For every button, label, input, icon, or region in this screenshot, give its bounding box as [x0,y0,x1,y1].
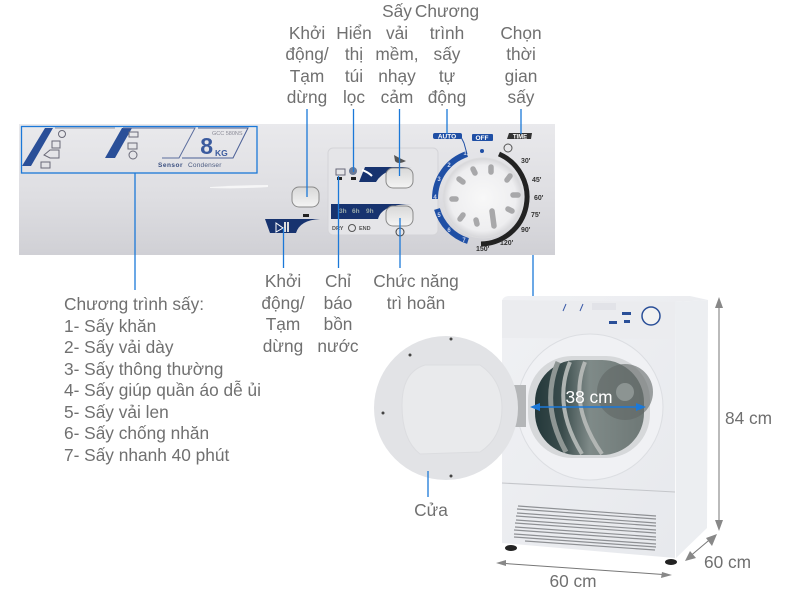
bottom callout labels: Chỉ [325,271,351,291]
top callout labels: gian [505,66,537,86]
top callout labels: động/ [285,44,329,64]
drying program list: 3- Sấy thông thường [64,359,223,379]
top callout labels: Sấy [382,1,412,21]
program dial: 75' [531,212,541,219]
program dial: 150' [476,246,490,253]
program dial: 30' [521,158,531,165]
program labels: KG [215,148,228,158]
start pause button [265,187,320,233]
top callout labels: động [428,87,466,107]
depth dimension: 60 cm [704,552,751,572]
drying program list: 4- Sấy giúp quần áo dễ ủi [64,380,261,400]
top callout labels: vải [386,23,408,43]
top callout labels: lọc [343,87,365,107]
center display group: DRY [332,226,344,232]
bottom callout labels: động/ [261,293,305,313]
height dimension [715,297,772,531]
drying program list: Chương trình sấy: [64,294,204,314]
top callout labels [285,1,542,107]
top callout labels: tự [439,66,456,86]
program dial: 120' [500,240,514,247]
top callout labels: dừng [287,87,327,107]
top callout labels: Chọn [500,23,542,43]
bottom callout labels: bồn [324,314,352,334]
height dimension: 84 cm [725,408,772,428]
program labels [22,128,248,169]
width dimension: 60 cm [549,571,597,591]
top callout labels: túi [345,66,363,86]
bottom callout labels: báo [324,293,352,313]
top callout labels: thời [506,44,536,64]
bottom callout labels: nước [317,336,359,356]
bottom callout labels: Khởi [265,271,301,291]
door [374,336,518,480]
center display group: 6h [352,208,360,215]
top callout labels: trình [430,23,464,43]
drying program list: 5- Sấy vải len [64,402,169,422]
dryer mini control panel [563,303,660,325]
program dial: 5 [437,213,441,219]
program dial: 7 [462,238,466,244]
hinge [513,385,526,427]
bottom callout labels: trì hoãn [387,293,445,313]
top callout labels: sấy [434,44,461,64]
center display group: 9h [366,208,374,215]
drying program list: 1- Sấy khăn [64,316,156,336]
top callout labels: Khởi [289,23,325,43]
door callout [414,471,448,520]
program dial [433,133,544,253]
program labels: GCC 580NS [212,131,243,137]
top callout labels: Chương [415,1,479,21]
program highlight box [22,126,257,173]
top callout labels: Hiển [336,23,372,43]
top callout labels: cảm [381,87,413,107]
program dial: 2 [447,163,451,169]
depth dimension [685,534,751,572]
center display group: 3h [339,208,347,215]
drying program list: 7- Sấy nhanh 40 phút [64,445,229,465]
top callout labels: sấy [508,87,535,107]
bottom callout labels: dừng [263,336,303,356]
dryer illustration [374,296,708,565]
top callout labels: Tạm [290,66,324,86]
door callout: Cửa [414,500,448,520]
control panel [19,124,555,255]
door diameter measure [530,387,646,411]
program dial: 6 [447,228,451,234]
program dial: 45' [532,177,542,184]
program dial: 4 [433,195,437,201]
program dial: 3 [437,177,441,183]
program labels: 8 [200,133,213,159]
vent grille [514,506,656,550]
drying program list [64,294,261,465]
top callout labels: mềm, [375,44,419,64]
width dimension [496,560,672,591]
drying program list: 6- Sấy chống nhăn [64,423,209,443]
center display group: END [359,226,371,232]
program labels: Sensor [158,162,183,169]
program labels: Condenser [188,162,222,169]
bottom callout labels [261,271,459,356]
bottom callout labels: Chức năng [373,271,459,291]
program dial: TIME [513,134,527,140]
bottom callout labels: Tạm [266,314,300,334]
drying program list: 2- Sấy vải dày [64,337,174,357]
program dial: 1 [463,151,467,157]
program dial: 60' [534,195,544,202]
callout lines [135,109,533,301]
top callout labels: thị [345,44,363,64]
program dial: 90' [521,227,531,234]
program dial: AUTO [438,134,456,140]
center display group [328,148,438,236]
top callout labels: nhạy [378,66,416,86]
program dial: OFF [476,135,489,142]
door diameter measure: 38 cm [565,387,613,407]
